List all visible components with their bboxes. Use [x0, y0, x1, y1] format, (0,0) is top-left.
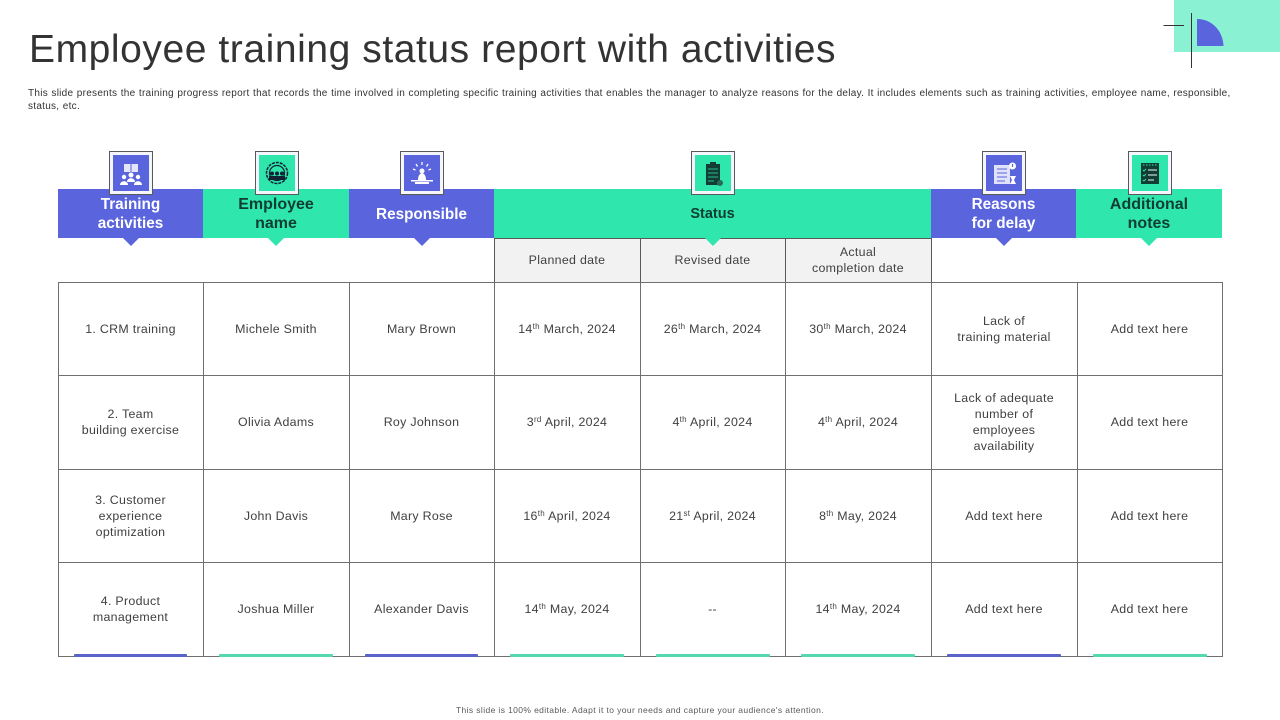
header: reasons for delay: Reasons: [972, 196, 1035, 213]
cell: Team building: building exercise: [82, 423, 179, 437]
sub-header: revised date: [640, 238, 786, 283]
table row 3: [58, 470, 1223, 562]
cell: Roy Johnson: [349, 375, 495, 470]
header: additional notes: Additional: [1110, 196, 1188, 213]
cell: Michele Smith: [203, 282, 350, 376]
sub-header: actual completion date: Actual: [840, 245, 876, 259]
cell: reason: [931, 562, 1078, 657]
cell: reason: Lack of: [983, 314, 1025, 328]
header: training activities: [58, 189, 203, 238]
cell: revised: 26th March, 2024: [664, 322, 761, 336]
cell: notes: [1077, 469, 1223, 563]
cell: planned: 14th May, 2024: [524, 602, 610, 616]
title: Employee training status report with activities: [29, 28, 836, 71]
cell: reason: Add text here: [965, 602, 1043, 616]
pointer: status: [705, 238, 721, 246]
cell: CRM training: 1. CRM training: [85, 322, 176, 336]
cell: Product management: [58, 562, 204, 657]
description text: status, etc.: [28, 101, 80, 112]
cell: Mary Rose: [349, 469, 495, 563]
cell: actual: 4th April, 2024: [818, 415, 898, 429]
cell: Customer experience: [58, 469, 204, 563]
cell: reason: [931, 469, 1078, 563]
sub-header: actual completion date: [785, 238, 932, 283]
cell: notes: [1077, 282, 1223, 376]
icon: employee name: [255, 151, 299, 195]
cell: revised: [640, 469, 786, 563]
cell: planned: 16th April, 2024: [523, 508, 611, 522]
cell: notes: Add text here: [1111, 508, 1188, 522]
header: status: Status: [690, 206, 735, 222]
header: responsible: [349, 189, 494, 238]
cell: Joshua Miller: Joshua Miller: [238, 602, 314, 616]
table row 1: [58, 282, 1223, 375]
cell: revised: 21st April, 2024: [669, 508, 756, 522]
cell: Customer experience: experience: [99, 508, 162, 522]
corner decoration: [1164, 0, 1280, 68]
cell: reason: [931, 282, 1078, 376]
header: employee name: [203, 189, 349, 238]
icon: responsible: [400, 151, 444, 195]
cell: Mary Brown: [349, 282, 495, 376]
cell: Alexander Davis: [349, 562, 495, 657]
cell: actual: 8th May, 2024: [819, 508, 897, 522]
cell: reason: availability: [974, 439, 1034, 453]
cell: revised: --: [708, 602, 717, 616]
header: reasons for delay: [931, 189, 1076, 238]
table row 2: [58, 376, 1223, 469]
cell: Joshua Miller: [203, 562, 350, 657]
cell: planned: [494, 282, 641, 376]
description text: This slide presents the training progress report that records the time involved in completing specific training activities that enables the manager to analyze reasons for the delay. It includes elements such as training activities, employee name, responsible,: [28, 88, 1231, 99]
header: employee name: Employee: [238, 196, 314, 213]
cell: Product management: management: [93, 610, 168, 624]
footer note: This slide is 100% editable. Adapt it to your needs and capture your audience's attention.: [456, 705, 824, 715]
pointer: additional notes: [1141, 238, 1157, 246]
cell: reason: Add text here: [965, 508, 1043, 522]
cell: reason: [931, 375, 1078, 470]
cell: actual: [785, 375, 932, 470]
pointer: reasons for delay: [996, 238, 1012, 246]
header: status: [494, 189, 931, 238]
sub-header: planned date: [494, 238, 641, 283]
cell: actual: [785, 282, 932, 376]
cell: John Davis: [203, 469, 350, 563]
header: training activities: activities: [98, 215, 163, 232]
cell: reason: training material: [957, 330, 1051, 344]
cell: Alexander Davis: Alexander Davis: [374, 602, 469, 616]
cell: actual: [785, 469, 932, 563]
cell: CRM training: [58, 282, 204, 376]
cell: Michele Smith: Michele Smith: [235, 322, 317, 336]
cell: Mary Rose: Mary Rose: [390, 508, 453, 522]
header: responsible: Responsible: [376, 206, 467, 222]
cell: reason: number of: [975, 407, 1033, 421]
sub-header: revised date: Revised date: [675, 253, 750, 267]
cell: Olivia Adams: Olivia Adams: [238, 415, 314, 429]
description text: [28, 88, 1231, 112]
cell: notes: [1077, 562, 1223, 657]
cell: reason: Lack of adequate: [954, 391, 1054, 405]
table row 4: [58, 563, 1223, 657]
cell: planned: 3rd April, 2024: [527, 415, 607, 429]
cell: actual: 30th March, 2024: [809, 322, 907, 336]
cell: notes: Add text here: [1111, 602, 1188, 616]
cell: actual: [785, 562, 932, 657]
cell: planned: [494, 562, 641, 657]
icon: additional notes: [1128, 151, 1172, 195]
cell: revised: [640, 562, 786, 657]
cell: revised: [640, 375, 786, 470]
cell: Product management: 4. Product: [101, 594, 160, 608]
pointer: responsible: [414, 238, 430, 246]
cell: planned: 14th March, 2024: [518, 322, 616, 336]
sub-header: planned date: Planned date: [529, 253, 605, 267]
cell: Team building: 2. Team: [108, 407, 153, 421]
icon: training activities: [109, 151, 153, 195]
cell: Roy Johnson: Roy Johnson: [384, 415, 459, 429]
cell: planned: [494, 469, 641, 563]
cell: John Davis: John Davis: [244, 508, 308, 522]
bottom accent bars: [74, 654, 1207, 657]
cell: notes: Add text here: [1111, 322, 1188, 336]
cell: revised: [640, 282, 786, 376]
cell: planned: [494, 375, 641, 470]
header: additional notes: notes: [1128, 215, 1170, 232]
cell: reason: employees: [973, 423, 1035, 437]
cell: notes: [1077, 375, 1223, 470]
header: additional notes: [1076, 189, 1222, 238]
pointer: training activities: [123, 238, 139, 246]
icon: status: [691, 151, 735, 195]
icon: reasons for delay: [982, 151, 1026, 195]
header: training activities: Training: [101, 196, 160, 213]
cell: revised: 4th April, 2024: [672, 415, 753, 429]
header: employee name: name: [255, 215, 297, 232]
cell: Olivia Adams: [203, 375, 350, 470]
header: reasons for delay: for delay: [972, 215, 1035, 232]
sub-header: actual completion date: completion date: [812, 261, 904, 275]
pointer: employee name: [268, 238, 284, 246]
cell: Customer experience: 3. Customer: [95, 492, 166, 506]
cell: Team building: [58, 375, 204, 470]
cell: actual: 14th May, 2024: [815, 602, 901, 616]
cell: notes: Add text here: [1111, 415, 1188, 429]
cell: Customer experience: optimization: [96, 524, 165, 538]
cell: Mary Brown: Mary Brown: [387, 322, 456, 336]
